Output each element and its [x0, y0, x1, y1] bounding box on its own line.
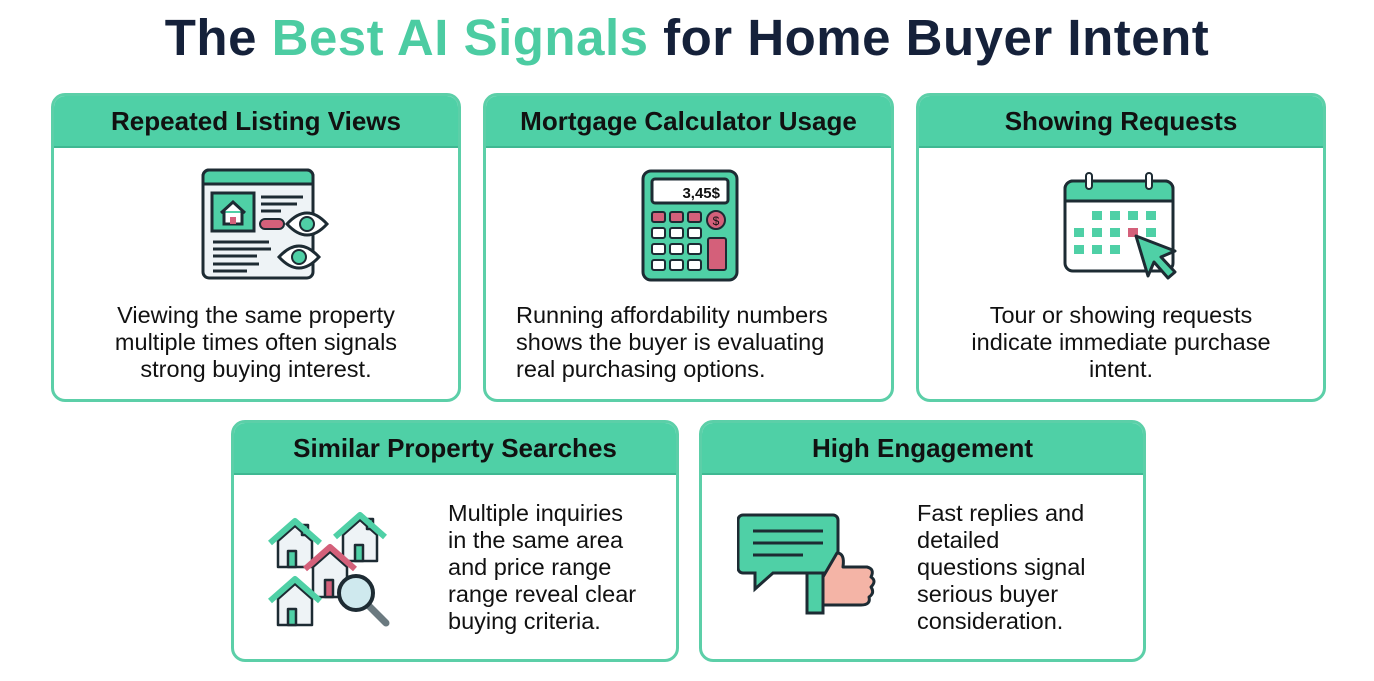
- heading: [486, 96, 891, 148]
- text: Viewing the same property: [117, 302, 395, 328]
- text: multiple times often signals: [115, 329, 397, 355]
- heading: Showing Requests: [1005, 106, 1237, 136]
- heading: [702, 423, 1143, 475]
- heading: [54, 96, 458, 148]
- text: [917, 500, 1086, 634]
- text: [516, 302, 828, 382]
- text: indicate immediate purchase: [971, 329, 1271, 355]
- heading: [919, 96, 1323, 148]
- text: Tour or showing requests: [990, 302, 1252, 328]
- text: detailed: [917, 527, 999, 553]
- panel: mortgage calculator: [483, 93, 894, 402]
- panel: high engagement: [699, 420, 1146, 662]
- icon: calculator: [642, 170, 738, 282]
- text: strong buying interest.: [140, 356, 372, 382]
- heading: Mortgage Calculator Usage: [520, 106, 857, 136]
- icon: calculator: $: [713, 214, 720, 228]
- icon: chat bubble and thumbs up: [737, 514, 876, 614]
- text: questions signal: [917, 554, 1086, 580]
- heading: Repeated Listing Views: [111, 106, 401, 136]
- panel: showing requests: [916, 93, 1326, 402]
- text: range reveal clear: [448, 581, 636, 607]
- text: in the same area: [448, 527, 623, 553]
- text: intent.: [1089, 356, 1153, 382]
- text: [115, 302, 397, 382]
- heading: High Engagement: [812, 433, 1033, 463]
- panel: similar property searches: [231, 420, 679, 662]
- icon: calculator: 3,45$: [682, 185, 721, 202]
- heading: [234, 423, 676, 475]
- icon: houses with magnifier: [268, 512, 390, 626]
- text: shows the buyer is evaluating: [516, 329, 824, 355]
- text: [971, 302, 1271, 382]
- text: Multiple inquiries: [448, 500, 623, 526]
- text: Fast replies and: [917, 500, 1084, 526]
- heading: Similar Property Searches: [293, 433, 617, 463]
- icon: listing with eyes: [202, 168, 329, 280]
- text: and price range: [448, 554, 611, 580]
- icon: calendar with cursor: [1064, 172, 1177, 280]
- text: buying criteria.: [448, 608, 601, 634]
- text: Running affordability numbers: [516, 302, 828, 328]
- title: The Best AI Signals for Home Buyer Intent: [165, 9, 1209, 66]
- text: [448, 500, 636, 634]
- text: real purchasing options.: [516, 356, 766, 382]
- text: serious buyer: [917, 581, 1058, 607]
- panel: repeated listing views: [51, 93, 461, 402]
- text: consideration.: [917, 608, 1063, 634]
